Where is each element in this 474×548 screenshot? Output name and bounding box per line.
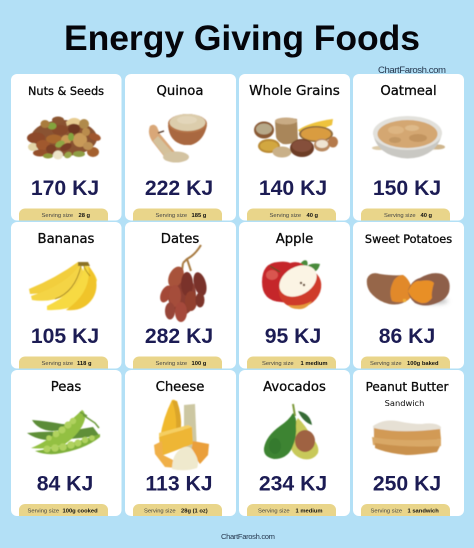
calorie value: 282 KJ [145,325,213,348]
serving size pill: 100g cooked [62,508,98,514]
serving size pill [247,208,336,220]
title: Energy Giving Foods [64,18,420,58]
serving size pill: 28 g [78,213,91,219]
serving size pill: Serving size [144,508,176,514]
serving size pill: Serving size [370,508,402,514]
panel: Quinoa [125,74,236,220]
heading: Quinoa: Quinoa [157,84,203,99]
heading: Avocados: Avocados [263,380,326,395]
calorie value: 140 KJ [259,177,327,200]
icon: nuts [27,116,102,160]
icon: oatmeal bowl [372,116,445,158]
calorie value: 113 KJ [145,472,213,496]
calorie value: 250 KJ [373,472,441,496]
serving size pill: Serving size [262,361,294,367]
serving size pill: Serving size [156,361,187,367]
panel: Nuts & Seeds [11,74,122,220]
serving size pill [19,356,108,368]
heading: Oatmeal: Oatmeal [380,84,437,99]
serving size pill: Serving size [42,361,73,367]
serving size pill: 1 medium [296,508,323,514]
watermark: top: ChartFarosh.com [378,65,446,76]
heading: Peas: Peas [51,380,81,395]
serving size pill [361,504,450,516]
serving size pill [361,356,450,368]
icon: avocados [264,404,318,459]
serving size pill: Serving size [42,213,73,219]
icon: dates [158,245,209,322]
serving size pill: 185 g [192,213,207,219]
icon: bananas [29,262,97,310]
serving size pill: 100 g [192,361,207,367]
serving size pill [247,504,336,516]
calorie value: 222 KJ [145,177,213,200]
icon: sweet potatoes [367,273,450,306]
serving size pill: Serving size [258,508,290,514]
calorie value: 86 KJ [379,325,435,348]
calorie value: 105 KJ [31,325,99,348]
serving size pill: Serving size [270,213,301,219]
serving size pill: 40 g [306,213,319,219]
serving size pill: Serving size [28,508,59,514]
serving size pill [19,208,108,220]
serving size pill [133,504,222,516]
serving size pill: 100g baked [407,361,439,367]
watermark: bottom: ChartFarosh.com [221,532,275,541]
serving size pill [19,504,108,516]
calorie value: 234 KJ [259,472,327,496]
serving size pill [361,208,450,220]
heading: Bananas: Bananas [38,232,95,247]
icon: cheese [154,400,209,470]
panel: Peanut Butter [353,370,464,516]
calorie value: 150 KJ [373,177,441,200]
panel: Peas [11,370,122,516]
serving size pill: Serving size [370,361,402,367]
heading: Nuts & Seeds: Nuts & Seeds [28,85,104,98]
serving size pill: Serving size [156,213,187,219]
panel: Dates [125,222,236,368]
panel: Apple [239,222,350,368]
serving size pill: 40 g [420,213,433,219]
serving size pill: 28g (1 oz) [181,508,208,514]
icon: quinoa bowl [149,114,207,162]
panel: Avocados [239,370,350,516]
serving size pill [247,356,336,368]
calorie value: 84 KJ [37,472,93,496]
panel: Oatmeal [353,74,464,220]
icon: apple [262,259,329,315]
heading: Whole Grains: Whole Grains [249,83,340,99]
panel: Sweet Potatoes [353,222,464,368]
calorie value: 170 KJ [31,177,99,200]
heading: Sweet Potatoes: Sweet Potatoes [365,233,452,246]
calorie value: 95 KJ [265,325,321,348]
panel: Cheese [125,370,236,516]
heading: Peanut Butter: Peanut Butter [366,380,448,394]
serving size pill: 118 g [77,361,92,367]
serving size pill [133,208,222,220]
serving size pill: Serving size [384,213,416,219]
serving size pill: 1 sandwich [408,508,439,514]
icon: peas [27,410,100,454]
panel: Bananas [11,222,122,368]
icon: grains [254,118,338,158]
heading: Dates: Dates [161,232,199,247]
serving size pill [133,356,222,368]
heading: Apple: Apple [276,232,313,247]
heading: Cheese: Cheese [156,380,204,395]
panel: Whole Grains [239,74,350,220]
sub-heading: Sandwich: Sandwich [385,398,424,408]
serving size pill: 1 medium [300,361,328,367]
icon: sandwich [372,421,441,455]
